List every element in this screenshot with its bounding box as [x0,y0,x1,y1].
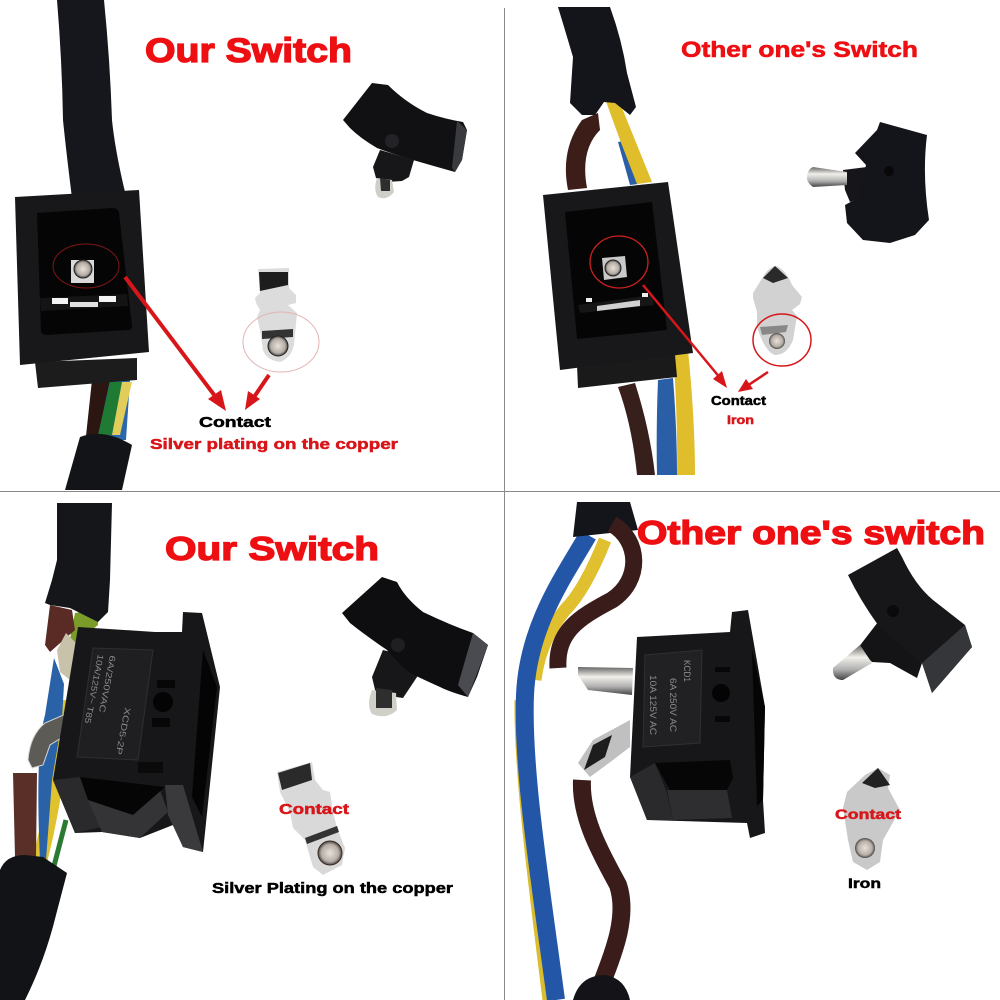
label: contact: Contact [835,806,901,822]
switch body [543,182,693,388]
cable and wires [558,7,695,475]
contact part [843,768,900,870]
switch body [15,190,149,388]
switch body [53,612,220,852]
label: contact: Contact [199,414,271,431]
panel: other switch side view [519,502,985,1000]
label: silver plating: Silver plating on the copper [150,436,398,453]
label: silver plating: Silver Plating on the copper [212,880,453,897]
label: iron: Iron [848,875,881,891]
title: Other one's Switch [681,37,918,62]
switch body: XCD5-2P [114,707,133,756]
knob [833,548,972,693]
cable and wires [57,0,132,490]
label: contact: Contact [279,801,349,818]
red highlight circle [753,314,811,366]
switch body: 10A/125V~ T85 [83,654,106,725]
contact part [753,266,802,355]
panel: our switch front view [15,0,467,490]
cable and wires [519,502,638,1000]
switch body [630,610,765,838]
highlight ellipse [243,312,319,372]
switch markings: 6A/250VAC [97,655,118,713]
switch body: 6A 250V AC [668,678,678,733]
label: iron: Iron [727,415,754,427]
arrow: to contact [125,277,226,411]
knob [343,83,467,198]
switch body: 10A 125V AC [648,675,658,736]
arrow: from circle [738,372,768,392]
title: Our Switch [165,530,379,567]
panel: our switch side view [0,503,488,1000]
panel: other switch front view [543,7,929,475]
label: contact: Contact [711,394,767,408]
knob [342,577,488,716]
contact part [255,268,297,362]
contact part [277,762,345,875]
switch markings: KCD1 [682,660,692,682]
cable and wires [0,503,112,1000]
red circle highlight [590,236,648,288]
terminals [578,667,633,777]
arrow: to contact [643,285,727,388]
arrow: from ellipse [245,375,269,410]
title: Our Switch [145,32,352,70]
knob [807,122,929,243]
title: Other one's switch [637,514,985,551]
red circle highlight [53,244,119,288]
